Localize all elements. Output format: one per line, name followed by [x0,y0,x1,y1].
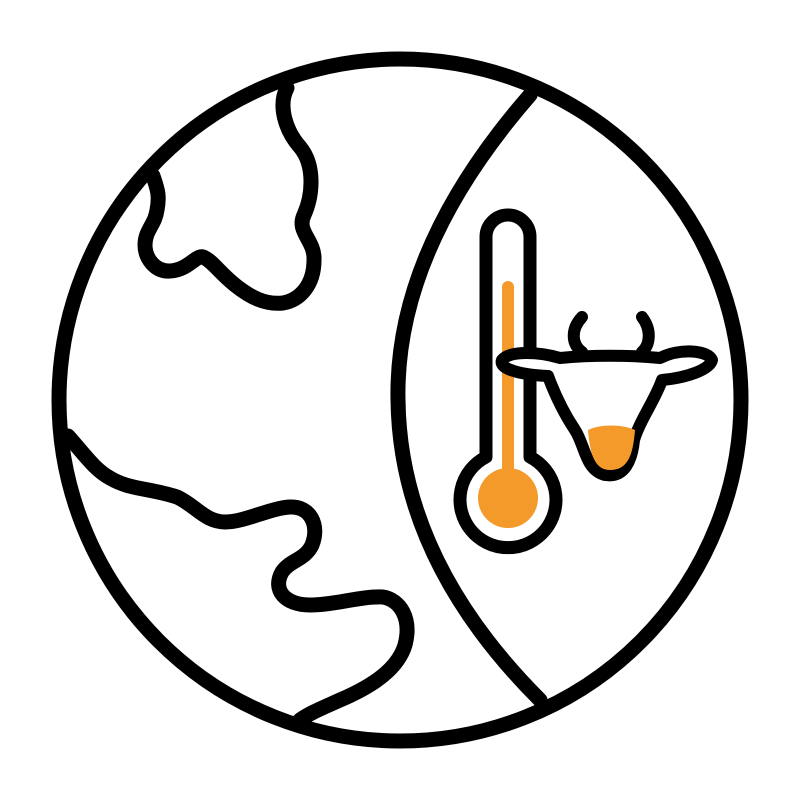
thermometer [460,215,556,548]
horns [574,317,582,352]
ears and face [502,351,712,475]
globe outline [59,59,741,741]
bottom continent [68,436,407,720]
top continent [145,88,314,303]
cow head [502,317,712,475]
muzzle [588,426,635,470]
globe meridian arc [398,95,540,700]
